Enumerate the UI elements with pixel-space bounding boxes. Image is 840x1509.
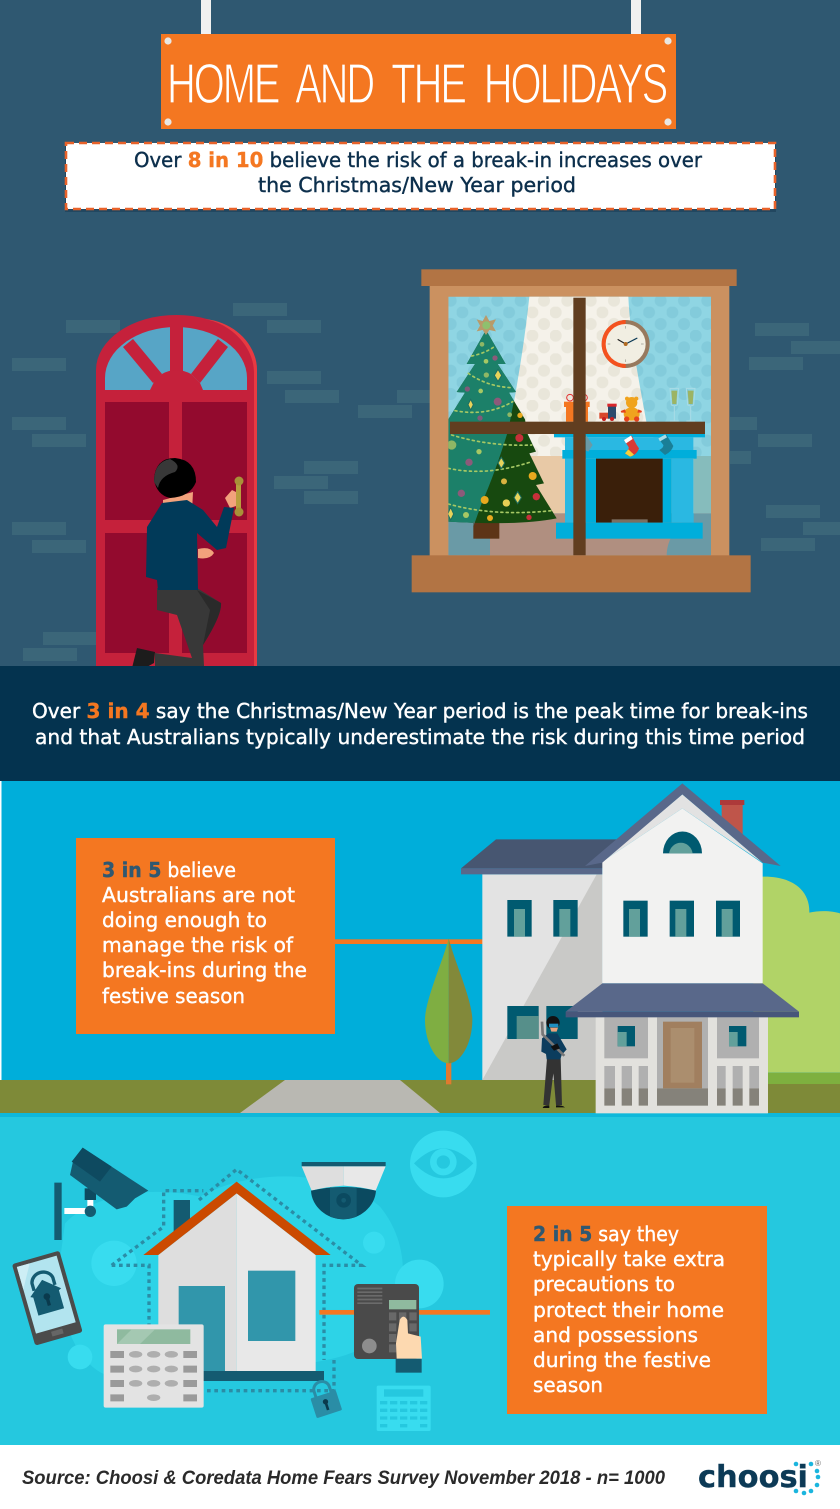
porch xyxy=(566,983,799,1113)
text box: 2 in 5: precautions to xyxy=(533,1272,675,1296)
text box: 2 in 5: during the festive xyxy=(533,1348,711,1372)
road xyxy=(240,1080,440,1113)
text box: 3 in 5: manage the risk of xyxy=(102,933,294,957)
wall bricks xyxy=(12,303,840,661)
bush xyxy=(753,877,840,1073)
dome camera xyxy=(302,1162,386,1219)
lower wall and floor xyxy=(448,423,711,555)
calculator pad faint xyxy=(377,1386,431,1431)
title: HOME AND THE HOLIDAYS xyxy=(167,52,668,116)
wall background xyxy=(0,0,840,666)
hanging sign with title xyxy=(161,0,676,129)
Christmas tree xyxy=(447,315,557,539)
ground xyxy=(0,1080,840,1113)
connector xyxy=(335,939,483,944)
window top ledge xyxy=(421,269,737,286)
text box: 2 in 5: typically take extra xyxy=(533,1247,725,1271)
text box: 2 in 5: 2 in 5 say they xyxy=(533,1222,679,1246)
dark band with 3 in 4 statement: and that Australians typically underestimate the risk during this time period xyxy=(35,725,805,749)
left wing xyxy=(461,839,617,1080)
dark band with 3 in 4 statement xyxy=(0,666,840,781)
dotted outline xyxy=(112,1169,362,1391)
text box: 3 in 5: Australians are not xyxy=(102,883,295,907)
door xyxy=(96,315,257,666)
alarm keypad xyxy=(104,1324,204,1408)
wall clock xyxy=(602,320,650,368)
text box: 3 in 5: festive season xyxy=(102,984,245,1008)
source line: Source: Choosi & Coredata Home Fears Survey November 2018 - n= 1000 xyxy=(22,1468,665,1489)
text box: 3 in 5: doing enough to xyxy=(102,908,267,932)
teddy bear xyxy=(621,397,642,422)
man kneeling at door xyxy=(132,458,244,668)
text box: 3 in 5: break-ins during the xyxy=(102,958,307,982)
intercom with hand xyxy=(354,1284,422,1373)
window with Christmas scene xyxy=(412,269,751,592)
curtain xyxy=(510,297,647,423)
banner: 8 in 10 xyxy=(65,143,776,212)
toy train xyxy=(599,404,617,421)
tablet with lock xyxy=(12,1251,83,1346)
house xyxy=(143,1182,331,1381)
banner: 8 in 10: Over 8 in 10 believe the risk of a break-in increases over xyxy=(134,148,703,172)
text box: 2 in 5: and possessions xyxy=(533,1323,698,1347)
choosi logo: ® xyxy=(815,1459,821,1468)
main house xyxy=(585,783,781,983)
panel: home security xyxy=(0,1117,840,1445)
banner: 8 in 10: the Christmas/New Year period xyxy=(258,173,576,197)
text box: 2 in 5: protect their home xyxy=(533,1298,724,1322)
padlock xyxy=(306,1378,342,1418)
fireplace xyxy=(554,433,705,539)
panel: street scene xyxy=(0,781,840,1117)
text box: 3 in 5: 3 in 5 believe xyxy=(102,858,236,882)
tree xyxy=(425,938,472,1084)
dark band with 3 in 4 statement: Over 3 in 4 say the Christmas/New Year period is the peak time for break-ins xyxy=(32,699,808,723)
footer xyxy=(0,1445,840,1509)
window cross bars xyxy=(450,298,705,555)
house illustration xyxy=(335,783,840,1113)
background blobs xyxy=(59,1131,477,1377)
text box: 2 in 5: season xyxy=(533,1373,603,1397)
wall camera xyxy=(54,1148,148,1240)
window sill xyxy=(412,555,751,592)
choosi logo: choosi xyxy=(698,1460,808,1495)
connector line xyxy=(319,1310,490,1315)
champagne glasses xyxy=(670,388,695,421)
text box: 2 in 5 xyxy=(507,1206,767,1414)
stockings xyxy=(586,434,673,457)
burglar xyxy=(541,1016,567,1108)
gift xyxy=(564,394,590,422)
text box: 3 in 5 xyxy=(76,838,335,1034)
chimney xyxy=(720,800,744,835)
